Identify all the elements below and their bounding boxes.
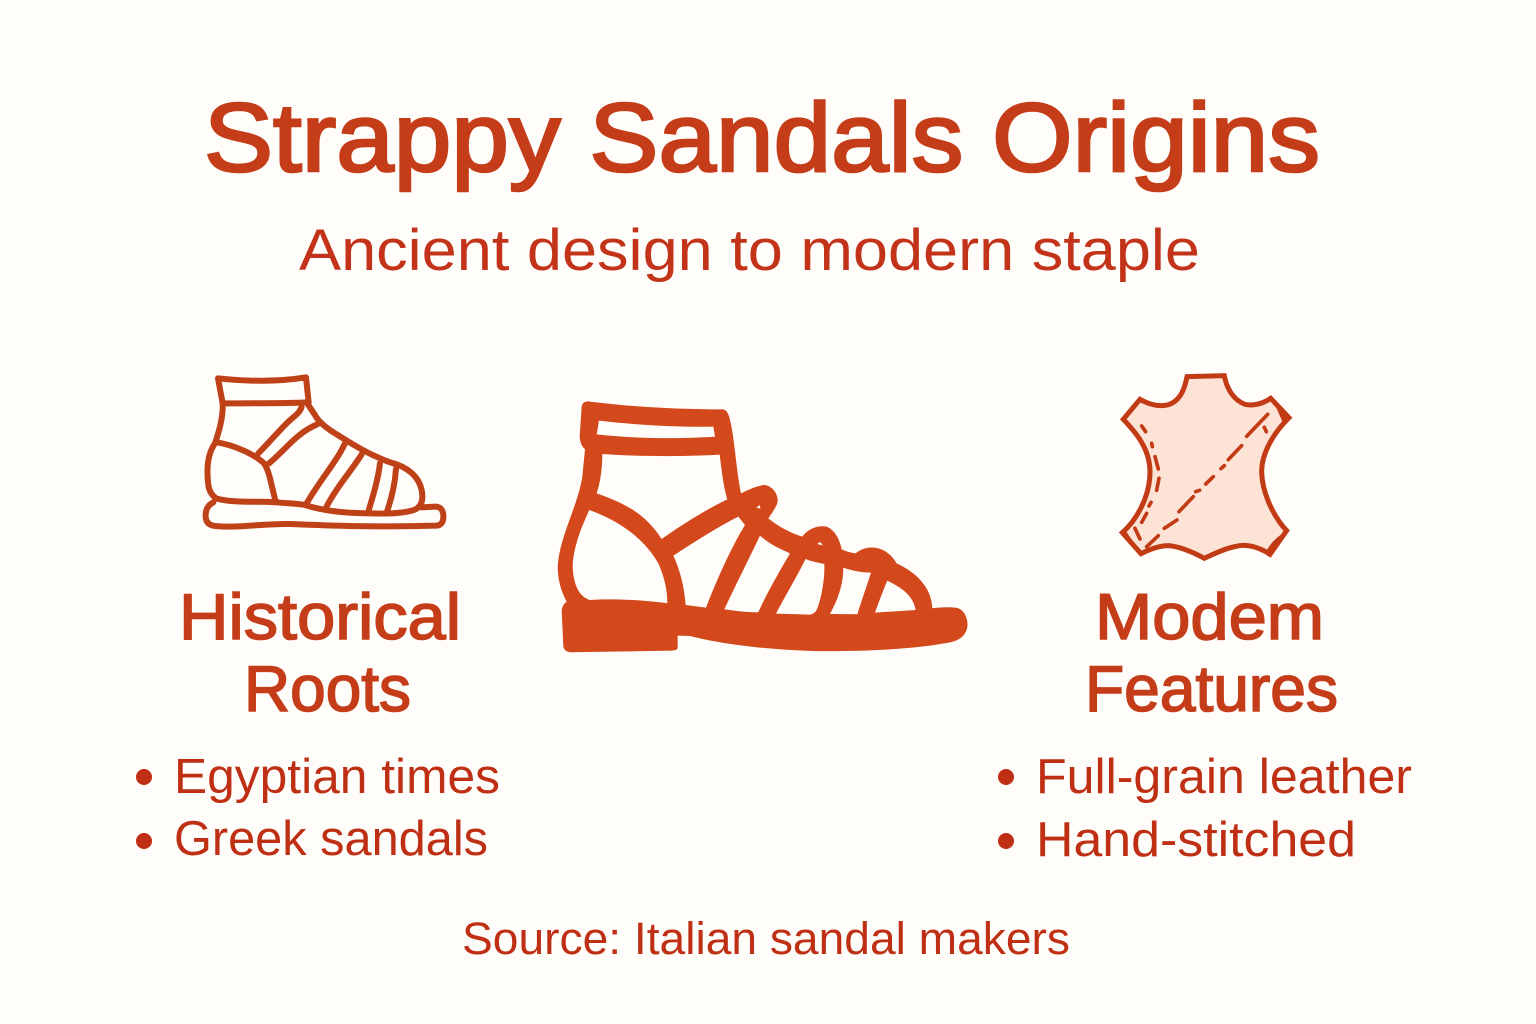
panel: historical roots <box>136 377 500 866</box>
heading: historical roots: Historical <box>179 580 461 653</box>
subtitle: Ancient design to modern staple <box>299 218 1200 283</box>
heading: modern features <box>1085 580 1338 725</box>
heading: modern features: Features <box>1085 652 1338 725</box>
source note: Source: Italian sandal makers <box>462 913 1070 964</box>
heading: historical roots: Roots <box>244 652 411 725</box>
panel: modern features <box>998 376 1412 867</box>
stitching: diagonal seam <box>1147 414 1268 547</box>
stitching: side seam <box>1135 426 1266 539</box>
heading: historical roots <box>179 580 461 725</box>
icon: outline sandal <box>206 377 443 527</box>
bullet list: modern features <box>998 750 1412 867</box>
bullet list: historical roots: Egyptian times <box>174 750 500 804</box>
bullet list: historical roots: Greek sandals <box>174 812 488 866</box>
icon: leather hide <box>1120 376 1290 558</box>
bullet list: modern features: Full-grain leather <box>1036 750 1412 804</box>
icon: central strappy sandal <box>558 401 967 652</box>
bullet list: historical roots <box>136 750 500 866</box>
title: Strappy Sandals Origins <box>204 83 1320 192</box>
heading: modern features: Modem <box>1095 580 1324 653</box>
bullet list: modern features: Hand-stitched <box>1036 813 1356 867</box>
